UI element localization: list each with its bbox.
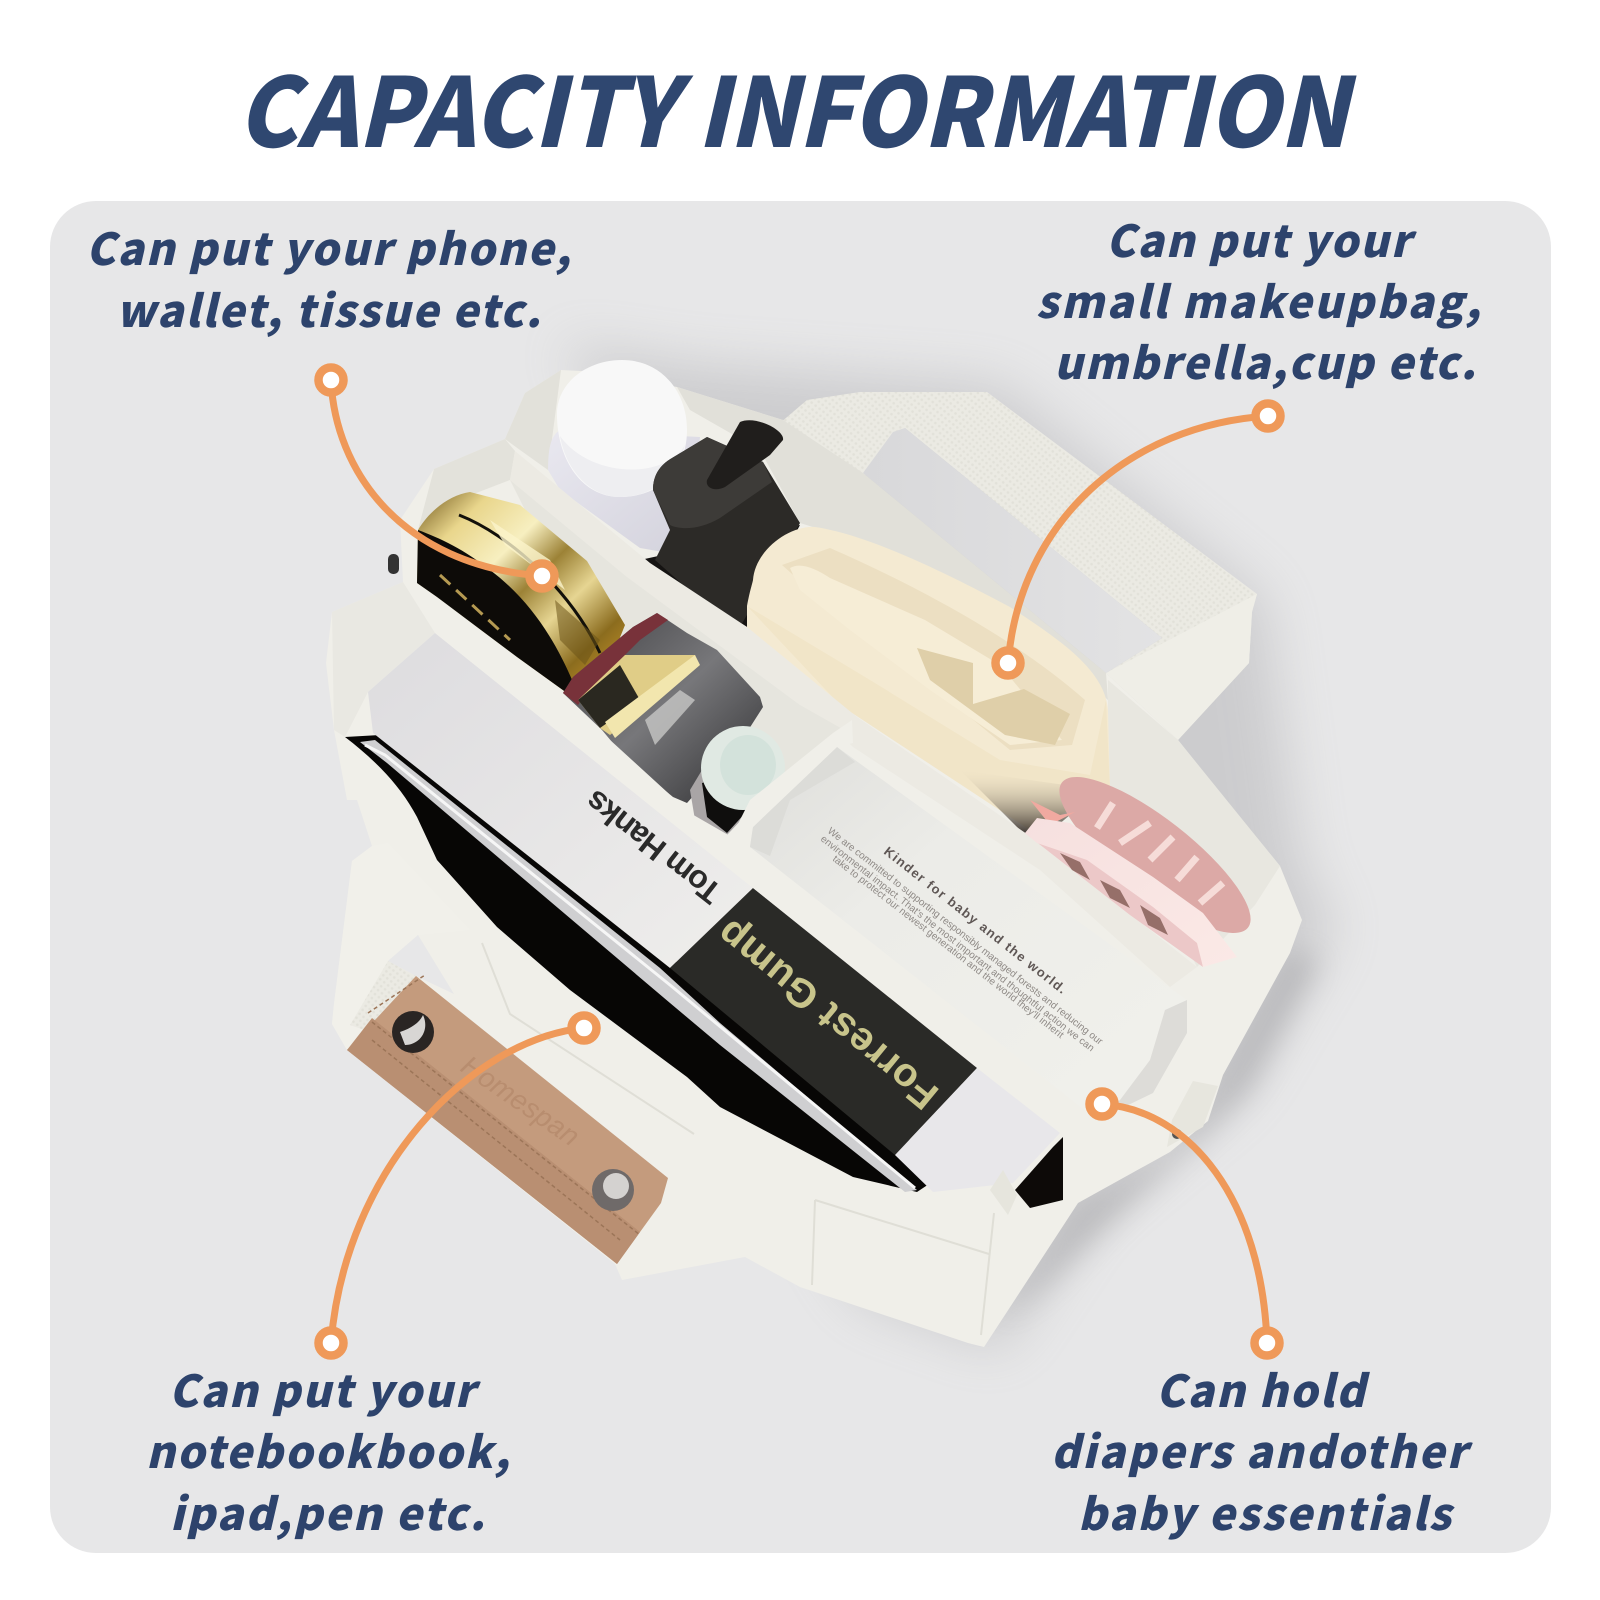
bag body <box>326 370 1302 1347</box>
divider: front rail <box>420 597 1090 1145</box>
icon: small bottle <box>690 726 785 835</box>
callout: bottom right <box>1090 1092 1280 1356</box>
label: diapers <box>1048 1356 1479 1543</box>
front pocket seams <box>482 943 994 1335</box>
label: diapers: diapers andother <box>1048 1417 1479 1481</box>
back interior walls <box>332 370 1280 967</box>
handle opening <box>863 428 1162 673</box>
icon: white bottle <box>548 360 700 552</box>
label: phone, wallet: Can put your phone, <box>83 214 583 278</box>
icon: bottom snap <box>592 1169 634 1211</box>
label: notebook, ipad: Can put your <box>166 1356 487 1420</box>
icon: gold compact jar <box>417 492 625 693</box>
dark compartment bottom <box>640 525 800 627</box>
icon: left snap <box>388 554 399 574</box>
label: makeup bag, umbrella <box>1033 206 1493 392</box>
photo: tote bag with contents <box>326 360 1302 1347</box>
icon: black pump bottle <box>653 420 800 627</box>
middle compartment wall <box>510 480 853 790</box>
icon: top snap <box>392 1011 434 1053</box>
divider: back rail <box>510 451 1197 987</box>
knot <box>990 1170 1017 1215</box>
icon: diaper pack: take to protect our newest generation and the world they'll inherit <box>830 854 1066 1041</box>
icon: beige folded pouch <box>747 527 1110 840</box>
callouts <box>318 368 1280 1356</box>
fan band <box>1025 818 1237 967</box>
bag shadow: broad <box>561 345 1335 1350</box>
book title: Forrest Gump <box>709 911 947 1118</box>
divider: cross rail <box>730 720 853 847</box>
pack text: Kinder for baby and the world. <box>881 844 1069 997</box>
title: CAPACITY INFORMATION <box>230 36 1374 176</box>
fan face <box>1025 830 1203 967</box>
back handle <box>780 392 1257 740</box>
label: diapers: Can hold <box>1153 1356 1377 1420</box>
label: notebook, ipad: ipad,pen etc. <box>167 1479 497 1543</box>
label: makeup bag, umbrella: Can put your <box>1103 206 1423 270</box>
callout: top right <box>996 404 1280 676</box>
icon: diaper pack: environmental impact. That's the most important and thoughtful action we can <box>818 834 1096 1054</box>
icon: pink fan <box>1025 754 1270 967</box>
icon: diaper pack <box>750 747 1187 1120</box>
callout: top left <box>318 368 554 588</box>
book end shadow <box>1015 1137 1063 1208</box>
leather tab <box>347 975 668 1264</box>
book end <box>895 1068 1060 1192</box>
front handle <box>332 843 470 1050</box>
bag shadow: tight <box>1000 950 1320 1320</box>
label: phone, wallet: wallet, tissue etc. <box>113 276 553 340</box>
tablet edge <box>360 740 917 1192</box>
icon: diaper pack: We are committed to supporting responsibly managed forests and reducing our <box>825 826 1105 1048</box>
tablet black shadow <box>345 735 950 1192</box>
label: notebook, ipad: notebookbook, <box>143 1417 522 1481</box>
label: diapers: baby essentials <box>1075 1479 1463 1543</box>
label: notebook, ipad <box>143 1356 522 1543</box>
panel: grey background <box>50 201 1551 1553</box>
icon: book and tablet <box>345 633 1063 1208</box>
label: makeup bag, umbrella: small makeupbag, <box>1033 267 1493 331</box>
icon: glass jar <box>563 613 763 803</box>
side tab <box>1167 1081 1218 1147</box>
label: phone, wallet <box>83 214 583 340</box>
book author: Tom Hanks <box>578 783 728 911</box>
book dark band <box>670 888 977 1155</box>
leather wordmark: Homespan <box>456 1049 585 1152</box>
callout: bottom left <box>318 1016 596 1356</box>
icon: side snap <box>1172 1129 1182 1139</box>
fan ribs <box>1097 803 1223 903</box>
book light cover <box>368 633 753 968</box>
label: makeup bag, umbrella: umbrella,cup etc. <box>1051 328 1488 392</box>
